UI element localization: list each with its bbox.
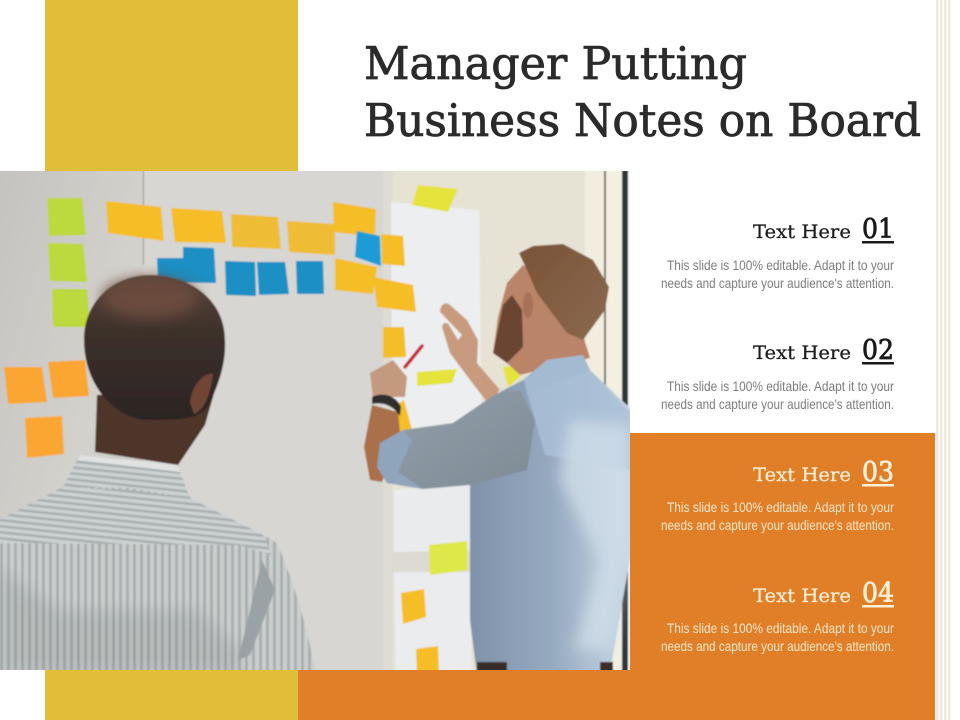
paper sheets (391, 202, 482, 675)
green sticky notes (47, 198, 90, 327)
fist (370, 360, 407, 397)
collar (64, 459, 189, 498)
orange block (298, 433, 935, 720)
item 01 (661, 214, 894, 291)
orange sticky notes (4, 360, 89, 458)
rolled sleeve arm (398, 390, 535, 490)
item 01 number: 01 (862, 214, 894, 245)
sleeve seam (238, 560, 275, 660)
yellow sticky notes (106, 201, 439, 675)
photo: two men at a notes board (0, 165, 638, 675)
ear (190, 374, 213, 414)
ear (523, 292, 533, 318)
title (364, 37, 921, 147)
watch (372, 395, 401, 416)
forearm (364, 405, 400, 482)
belt right (600, 662, 613, 672)
item 02 description: needs and capture your audience's attention. (661, 396, 894, 412)
item 02 underline (862, 362, 894, 364)
man on the right (364, 244, 632, 675)
item 03 description: needs and capture your audience's attention. (661, 517, 894, 533)
item 01 description: This slide is 100% editable. Adapt it to your (667, 257, 894, 273)
item 04 heading: Text Here (753, 585, 851, 607)
collar (523, 356, 589, 385)
item 02 description: This slide is 100% editable. Adapt it to your (667, 378, 894, 394)
item 03 number: 03 (862, 457, 894, 488)
shirt shadow (2, 577, 238, 670)
item 03 description (661, 499, 894, 533)
item 04 (661, 578, 894, 654)
item 03 heading: Text Here (753, 464, 851, 486)
item 01 underline (862, 241, 894, 244)
shoulder light area (525, 372, 630, 470)
side stripes (936, 0, 950, 720)
item 02 heading: Text Here (753, 342, 851, 364)
yellow block bottom (45, 670, 298, 720)
item 01 heading: Text Here (753, 221, 851, 243)
yellow block top (45, 0, 298, 171)
item 04 description: needs and capture your audience's attention. (661, 638, 894, 654)
item 04 number: 04 (862, 578, 894, 609)
raised hand (440, 303, 500, 402)
item 03 underline (862, 484, 894, 486)
item 01 description: needs and capture your audience's attention. (661, 275, 894, 291)
title: Manager Putting (364, 37, 747, 90)
belt left (477, 662, 507, 672)
item 02 number: 02 (862, 335, 894, 366)
rolled cuff (377, 430, 423, 489)
item 04 underline (862, 605, 894, 608)
item 03 description: This slide is 100% editable. Adapt it to your (667, 499, 894, 515)
item 01 description (661, 257, 894, 291)
neck (95, 390, 215, 465)
item 02 (661, 335, 894, 412)
item 02 description (661, 378, 894, 412)
crown highlight (102, 278, 198, 318)
shirt yoke (0, 487, 272, 555)
item 04 description (661, 620, 894, 654)
wall and board (0, 165, 638, 675)
neck and face (493, 265, 590, 375)
beard (493, 295, 523, 363)
hair (519, 244, 609, 340)
man on the left (0, 275, 316, 675)
blue sticky notes (157, 231, 381, 296)
shirt body (470, 355, 632, 675)
head (84, 275, 225, 420)
collar top edge (78, 455, 180, 472)
item 03 (661, 457, 894, 533)
shirt back (0, 487, 315, 670)
pale lime sticky notes (412, 185, 520, 575)
title: Business Notes on Board (364, 94, 921, 147)
pen (405, 346, 422, 367)
shirt highlights (560, 420, 630, 650)
item 04 description: This slide is 100% editable. Adapt it to your (667, 620, 894, 636)
